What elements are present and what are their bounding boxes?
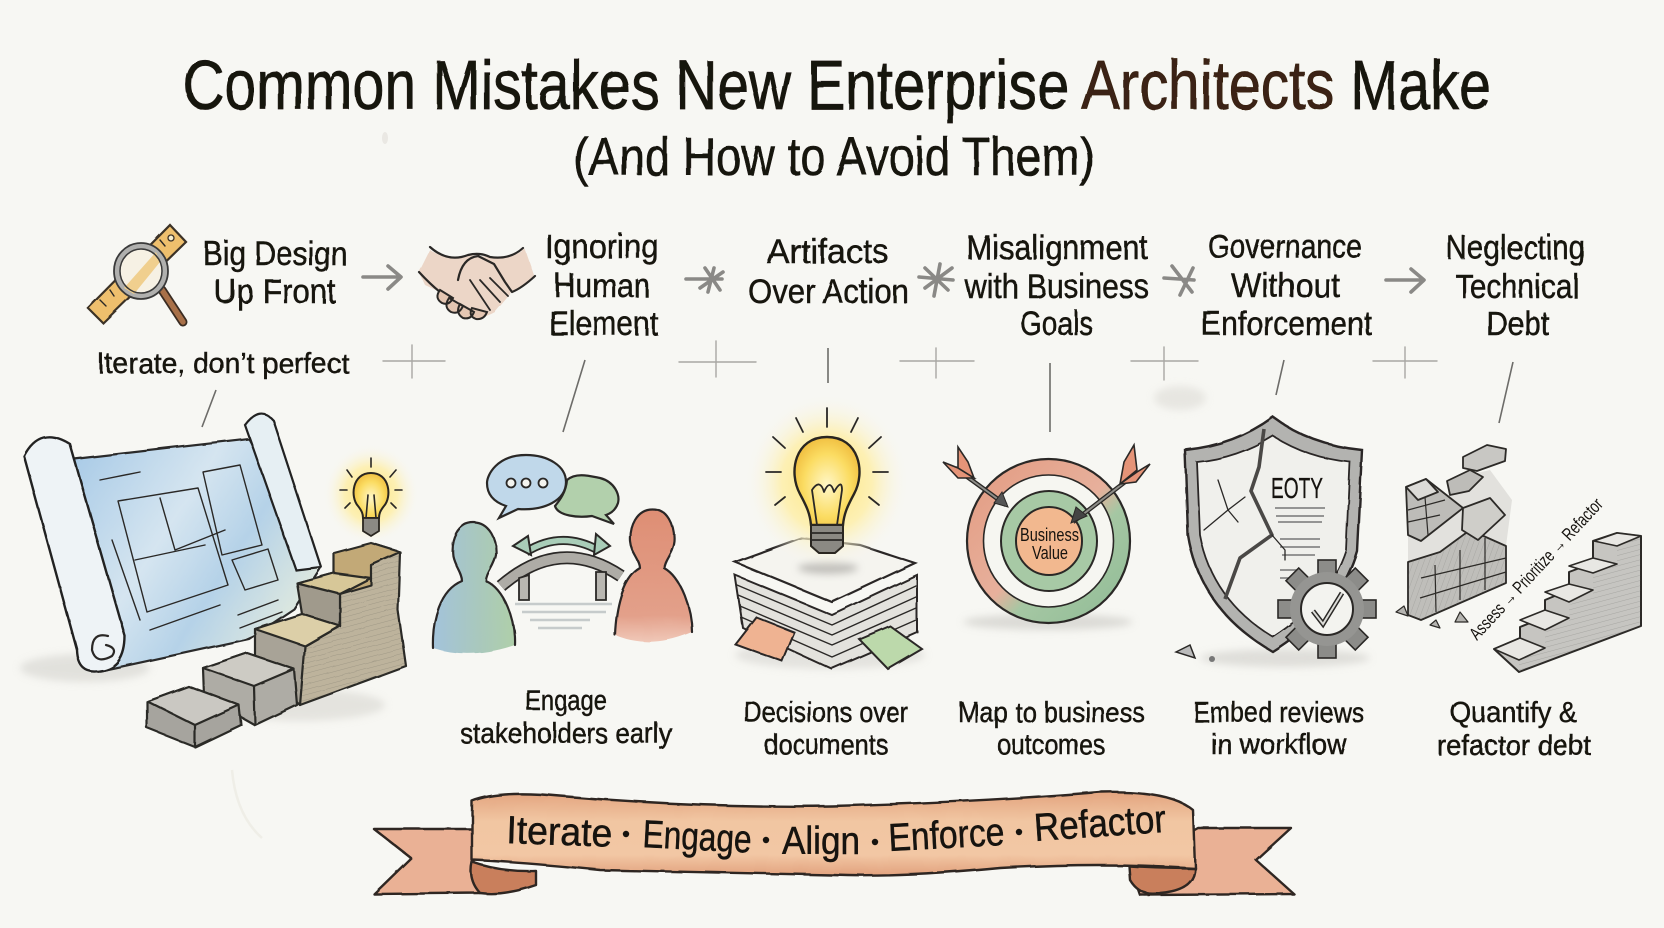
panel: governance without enforcement (1176, 228, 1376, 761)
panel: big design up front (20, 225, 419, 747)
caption: embed reviews: in workflow (1211, 729, 1348, 761)
caption: embed reviews (1193, 697, 1364, 761)
caption: map to business outcomes: outcomes (997, 729, 1105, 761)
illustration: staircase (1494, 533, 1641, 672)
star arrow 2 (686, 268, 723, 292)
heading: artifacts over action: Over Action (748, 273, 909, 311)
banner ribbon (374, 792, 1294, 895)
panel: misalignment with business goals (943, 229, 1150, 761)
caption: quantify and refactor: Quantify & (1450, 697, 1577, 729)
heading: artifacts over action (748, 233, 909, 311)
illustration: stone steps (147, 543, 406, 747)
person left (433, 523, 515, 653)
title: Common Mistakes New Enterprise Architects Make (183, 46, 1491, 124)
banner text: Engage (642, 813, 753, 862)
double arrow (513, 534, 610, 555)
banner text: Enforce (887, 811, 1005, 860)
heading: misalignment: Goals (1020, 305, 1093, 343)
banner text: Refactor (1033, 798, 1167, 850)
caption: map to business outcomes (958, 697, 1145, 761)
heading: neglecting: Debt (1486, 305, 1549, 343)
icon: handshake (419, 247, 535, 319)
arrow right (1071, 445, 1150, 523)
star arrow 4 (1164, 266, 1194, 295)
heading: neglecting: Neglecting (1446, 229, 1585, 267)
speech bubble blue (487, 455, 566, 518)
bridge (501, 558, 621, 628)
heading: neglecting (1446, 229, 1585, 343)
caption: map to business outcomes: Map to business (958, 697, 1145, 729)
illustration: crumbling wall (1396, 445, 1512, 628)
panel: artifacts over action (735, 233, 925, 761)
heading: ignoring human element (545, 228, 659, 343)
heading: misalignment: Misalignment (966, 229, 1148, 267)
icon: ruler and magnifier (88, 225, 186, 323)
heading: artifacts over action: Artifacts (767, 233, 889, 271)
star arrow 3 (919, 264, 953, 296)
heading: big design up front: Up Front (214, 273, 337, 311)
heading: governance: Without (1231, 267, 1341, 305)
icon: big light bulb (745, 394, 909, 570)
heading: big design up front: Big Design (203, 235, 347, 273)
caption: engage stakeholders: Engage (525, 685, 607, 717)
caption: engage stakeholders (460, 685, 672, 750)
heading: big design up front (203, 235, 347, 311)
illustration: target with arrows (943, 445, 1150, 630)
sticky note orange (735, 617, 794, 661)
cross dividers and pointer lines (202, 341, 1513, 432)
illustration: paper stack (735, 538, 925, 669)
panel: neglecting technical debt (1396, 229, 1641, 762)
illustration: people, speech bubbles and bridge (433, 455, 692, 653)
illustration: blueprint (20, 414, 321, 682)
heading: governance (1201, 228, 1372, 343)
caption: iterate: Iterate, don’t perfect (97, 348, 349, 380)
panel: ignoring human element (419, 228, 692, 750)
flow arrows (363, 264, 1424, 296)
caption: engage stakeholders: stakeholders early (460, 718, 672, 750)
stair label: Assess → Prioritize → Refactor (1465, 494, 1607, 644)
sticky note green (859, 626, 922, 669)
heading: governance: Governance (1208, 228, 1362, 266)
icon: small light bulb (323, 444, 419, 544)
target label: Value (1032, 543, 1068, 563)
banner text: Align (782, 820, 860, 863)
heading: misalignment: with Business (964, 268, 1149, 306)
arrow left (943, 447, 1008, 507)
banner text (506, 798, 1167, 863)
heading: neglecting: Technical (1455, 268, 1579, 306)
document text EOTY: EOTY (1271, 473, 1323, 505)
caption: quantify and refactor (1437, 697, 1591, 762)
heading: ignoring human element: Human (554, 267, 650, 305)
banner (374, 792, 1294, 895)
arrow 5 (1386, 269, 1424, 292)
icon: gear with check (1278, 560, 1376, 658)
caption: embed reviews: Embed reviews (1193, 697, 1364, 729)
heading: governance: Enforcement (1201, 305, 1372, 343)
subtitle: (And How to Avoid Them) (573, 127, 1095, 187)
heading: ignoring human element: Element (549, 305, 658, 343)
arrow 1 (363, 266, 401, 289)
banner text: Iterate (506, 809, 613, 856)
caption: decisions over documents (744, 697, 908, 761)
target label: Business (1020, 525, 1079, 545)
speech bubble green (555, 475, 618, 524)
caption: decisions over documents: Decisions over (744, 697, 908, 729)
heading: misalignment (964, 229, 1149, 343)
target label (1020, 525, 1079, 563)
person right (615, 509, 692, 642)
caption: decisions over documents: documents (764, 729, 888, 761)
caption: quantify and refactor: refactor debt (1437, 730, 1591, 762)
illustration: cracked shield (1176, 417, 1370, 667)
heading: ignoring human element: Ignoring (545, 228, 659, 266)
